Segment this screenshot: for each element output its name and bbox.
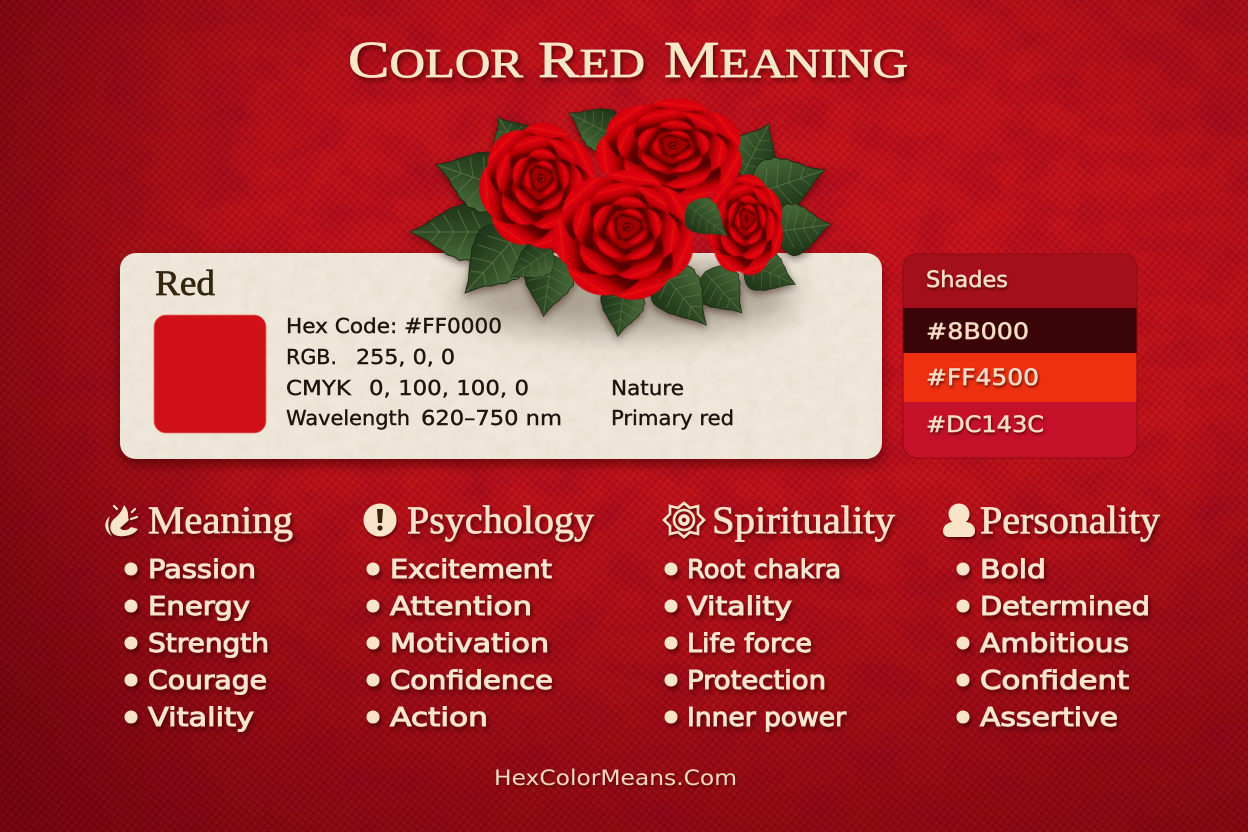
- colour specifications: Nature: [611, 376, 684, 400]
- title: RED: [538, 32, 645, 89]
- colour specifications: Hex Code: #FF0000: [286, 314, 502, 338]
- shades labels: #FF4500: [926, 366, 1039, 391]
- colour specifications: [286, 314, 734, 430]
- icon: chakra: [664, 503, 704, 537]
- heading: psychology: Psychology: [407, 499, 595, 542]
- list: psychology: Action: [390, 703, 488, 733]
- section: personality: [943, 499, 1161, 733]
- list: spirituality: Protection: [687, 666, 826, 696]
- heading: spirituality: Spirituality: [712, 499, 896, 542]
- colour swatch: [154, 315, 266, 433]
- list: spirituality: Vitality: [687, 592, 792, 622]
- icon: person: [943, 504, 975, 537]
- shades labels: #DC143C: [926, 413, 1044, 438]
- panel: shades: [903, 254, 1137, 458]
- colour specifications: CMYK: [286, 376, 352, 400]
- illustration: red roses with leaves: [410, 92, 834, 342]
- list: psychology: Motivation: [390, 629, 549, 659]
- list: personality: Ambitious: [980, 629, 1129, 659]
- list: meaning: Vitality: [148, 703, 254, 733]
- colour specifications: Wavelength: [286, 406, 410, 430]
- list: meaning: Energy: [148, 592, 250, 622]
- card heading: Red: Red: [155, 263, 215, 303]
- list: spirituality: [664, 555, 846, 733]
- list: spirituality: Inner power: [687, 703, 846, 733]
- colour specifications: 255, 0, 0: [356, 345, 455, 369]
- icon: exclamation: [364, 504, 396, 536]
- list: personality: Confident: [980, 666, 1129, 696]
- title: [348, 32, 908, 89]
- list: meaning: Passion: [148, 555, 256, 585]
- section: meaning: [105, 499, 293, 733]
- rose: right: [702, 168, 790, 283]
- list: psychology: Excitement: [390, 555, 552, 585]
- footer: website: HexColorMeans.Com: [494, 766, 737, 790]
- rose: front: [545, 162, 706, 310]
- list: spirituality: Life force: [687, 629, 812, 659]
- icon: flame: [105, 505, 138, 536]
- heading: personality: Personality: [980, 499, 1161, 542]
- list: personality: Bold: [980, 555, 1046, 585]
- title: COLOR: [348, 32, 524, 89]
- heading: meaning: Meaning: [148, 499, 293, 542]
- list: personality: [956, 555, 1150, 733]
- title: MEANING: [664, 32, 908, 89]
- list: meaning: Courage: [148, 666, 267, 696]
- colour specifications: RGB.: [286, 345, 337, 369]
- leaf: front accent: [677, 190, 739, 250]
- shades labels: #8B000: [926, 320, 1029, 345]
- list: psychology: Confidence: [390, 666, 553, 696]
- list: personality: Assertive: [980, 703, 1118, 733]
- colour specifications: 620–750 nm: [421, 406, 562, 430]
- section: psychology: [364, 499, 595, 733]
- rose: top centre: [588, 92, 756, 214]
- shades labels: [926, 268, 1044, 438]
- list: personality: Determined: [980, 592, 1150, 622]
- list: spirituality: Root chakra: [687, 555, 841, 585]
- panel: red colour card: [120, 253, 882, 459]
- list: psychology: Attention: [390, 592, 532, 622]
- rose: top left: [473, 115, 606, 259]
- colour specifications: 0, 100, 100, 0: [369, 376, 529, 400]
- list: meaning: Strength: [148, 629, 269, 659]
- colour specifications: Primary red: [611, 406, 734, 430]
- list: meaning: [124, 555, 269, 733]
- list: psychology: [366, 555, 553, 733]
- section: spirituality: [664, 499, 896, 733]
- shades labels: Shades: [926, 268, 1008, 293]
